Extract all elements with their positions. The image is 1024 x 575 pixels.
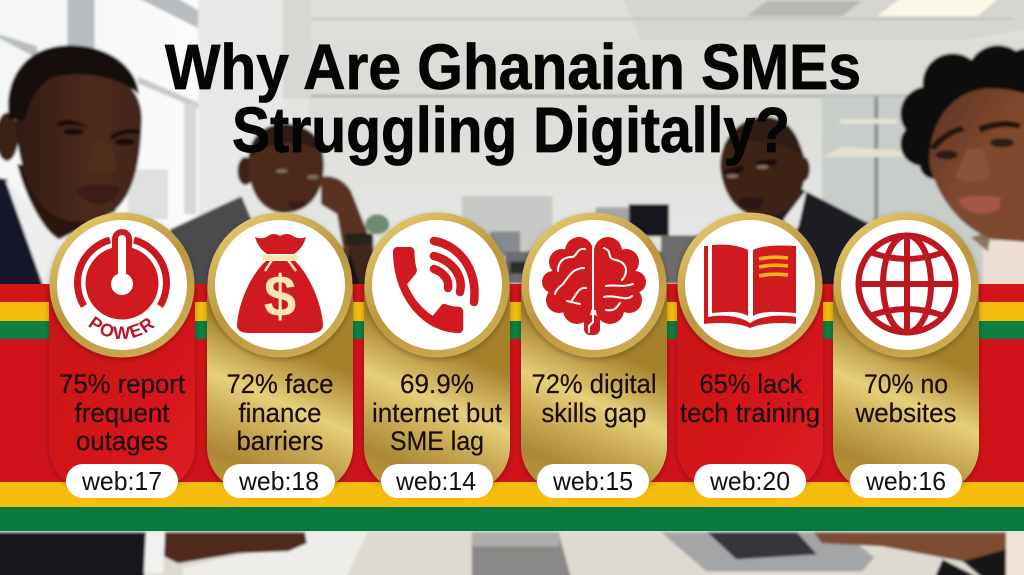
medallion xyxy=(364,212,510,358)
stat text xyxy=(372,369,503,456)
stat text: 72% digital xyxy=(532,369,656,399)
stat text: finance xyxy=(238,398,322,428)
card: digital skills xyxy=(521,212,667,498)
card: power outages xyxy=(46,212,198,498)
medallion xyxy=(678,212,822,358)
stat text: outages xyxy=(76,426,168,456)
top yellow band xyxy=(0,302,1024,321)
card: internet lag xyxy=(364,212,510,498)
title line 1: Why Are Ghanaian SMEs xyxy=(165,31,861,103)
stat text xyxy=(680,369,820,428)
medallion xyxy=(834,212,978,358)
icon: globe xyxy=(858,235,956,333)
source pill: web:18 xyxy=(238,466,319,496)
title xyxy=(165,31,861,166)
ceiling xyxy=(198,0,1024,40)
icon: brain xyxy=(542,237,646,335)
person 4 xyxy=(900,45,1024,289)
card: tech training xyxy=(677,212,823,498)
source pill xyxy=(223,464,335,498)
card body xyxy=(833,285,979,492)
glass partition xyxy=(309,95,1024,288)
bottom green band xyxy=(0,507,1024,531)
stat text: SME lag xyxy=(390,426,484,456)
card body xyxy=(677,285,823,492)
title line 2: Struggling Digitally? xyxy=(232,94,790,166)
card body xyxy=(207,285,353,492)
stat text: skills gap xyxy=(542,398,646,428)
person 2 xyxy=(170,124,377,289)
left column and window xyxy=(0,0,311,289)
icon: money bag: $ xyxy=(264,264,296,329)
medallion xyxy=(208,212,352,358)
source pill xyxy=(537,464,649,498)
card: finance barriers xyxy=(207,212,353,498)
source pill: web:20 xyxy=(709,466,790,496)
stat text: 75% report xyxy=(59,369,186,399)
source pill xyxy=(850,464,962,498)
top green band xyxy=(0,321,1024,339)
card: no websites xyxy=(833,212,979,498)
table and foreground xyxy=(0,532,1024,575)
person 1 xyxy=(0,45,142,289)
stat text: barriers xyxy=(236,426,324,456)
ghana flag bands xyxy=(0,284,1024,531)
source pill: web:14 xyxy=(395,466,476,496)
card body xyxy=(521,285,667,492)
bottom yellow band xyxy=(0,482,1024,507)
back office desks xyxy=(365,196,721,284)
medallion xyxy=(50,212,194,358)
stat text: 72% face xyxy=(226,369,334,399)
card body xyxy=(49,285,195,492)
source pill xyxy=(66,464,178,498)
stat text: frequent xyxy=(74,398,170,428)
stat text: tech training xyxy=(680,398,820,428)
stat text xyxy=(59,369,186,456)
top red band xyxy=(0,284,1024,302)
icon: money bag xyxy=(237,234,323,333)
card body xyxy=(364,285,510,492)
source pill: web:17 xyxy=(81,466,162,496)
medallion xyxy=(522,212,666,358)
source pill: web:16 xyxy=(865,466,946,496)
stat text xyxy=(855,369,956,428)
source pill xyxy=(694,464,806,498)
person 3 xyxy=(720,117,870,289)
stat text: internet but xyxy=(372,398,503,428)
stat text: 69.9% xyxy=(400,369,474,399)
stat text xyxy=(226,369,334,456)
icon: power: POWER xyxy=(88,316,156,339)
icon: open book xyxy=(704,245,796,328)
rear wall xyxy=(309,40,1024,97)
source pill: web:15 xyxy=(552,466,633,496)
stat text xyxy=(532,369,656,428)
central red field xyxy=(0,339,1024,482)
stat text: 70% no xyxy=(864,369,948,399)
stat text: websites xyxy=(855,398,956,428)
stat text: 65% lack xyxy=(700,369,803,399)
icon: power xyxy=(74,229,170,339)
icon: phone with signal xyxy=(393,241,475,333)
source pill xyxy=(381,464,493,498)
